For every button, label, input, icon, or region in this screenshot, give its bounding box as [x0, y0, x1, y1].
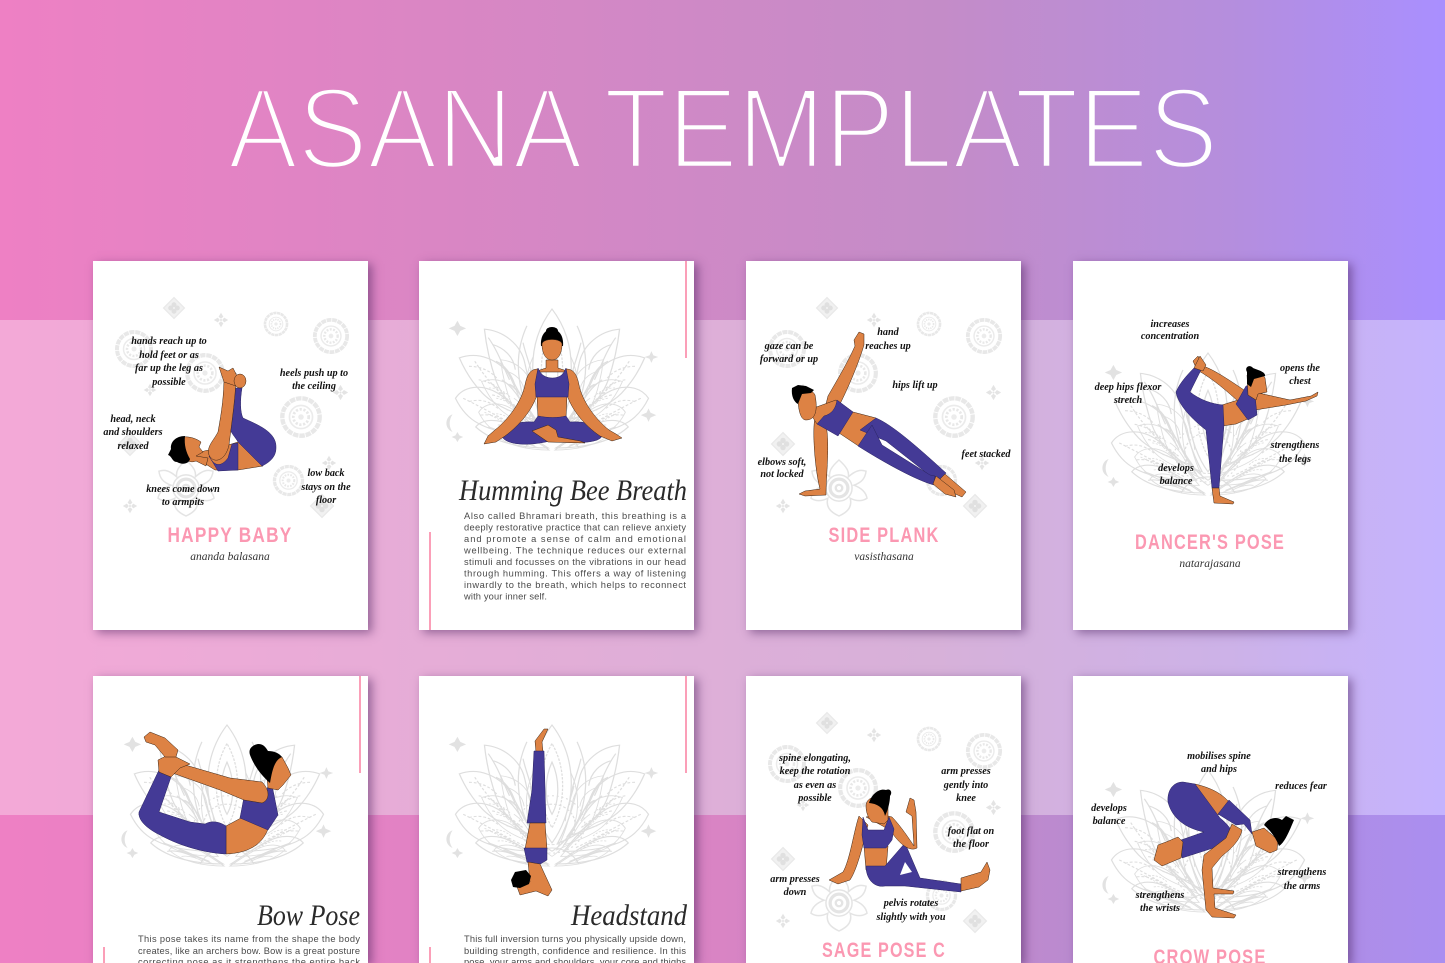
body text: creates, like an archers bow. Bow is a great posture — [138, 946, 360, 956]
annotations: the wrists — [1140, 903, 1180, 914]
annotations: opens the — [1280, 363, 1320, 374]
title: ASANA TEMPLATES — [228, 65, 1218, 193]
mandala lotus — [446, 309, 658, 450]
body text: with your inner self. — [463, 592, 547, 602]
panel: sage pose c — [746, 676, 1021, 963]
annotations — [1091, 751, 1328, 914]
annotations: elbows soft, — [758, 457, 806, 468]
annotations: balance — [1093, 816, 1126, 827]
annotations: hands reach up to — [131, 336, 207, 347]
annotations: gaze can be — [764, 341, 814, 352]
annotations: strengthens — [1270, 440, 1319, 451]
annotations: low back — [307, 468, 345, 479]
annotations: reduces fear — [1275, 781, 1328, 792]
annotations: hips lift up — [892, 380, 938, 391]
annotations: and hips — [1201, 764, 1237, 775]
figure: crow pose — [1154, 782, 1294, 918]
annotations: chest — [1289, 376, 1312, 387]
panel: happy baby — [93, 261, 368, 630]
annotations: keep the rotation — [780, 766, 851, 777]
annotations: gently into — [943, 780, 988, 791]
body text: wellbeing. The technique reduces our external — [463, 546, 686, 556]
panel: side plank — [746, 261, 1021, 630]
body text: through humming. This offers a way of listening — [464, 568, 686, 578]
annotations: heels push up to — [280, 368, 348, 379]
annotations: not locked — [760, 469, 805, 480]
figure: bow pose — [139, 732, 291, 854]
mandala background — [117, 298, 348, 517]
body text: Also called Bhramari breath, this breathing is a — [464, 511, 687, 521]
annotations: the floor — [953, 839, 990, 850]
panel: dancer's pose — [1073, 261, 1348, 630]
sanskrit name: natarajasana — [1179, 558, 1241, 570]
figure: side plank — [792, 332, 966, 497]
annotations — [770, 753, 995, 923]
annotations: increases — [1150, 319, 1190, 330]
body text — [463, 511, 687, 602]
mandala lotus — [121, 725, 333, 866]
annotations: down — [784, 887, 807, 898]
panel: crow pose — [1073, 676, 1348, 963]
sanskrit name: vasisthasana — [854, 551, 914, 563]
annotations: stays on the — [300, 482, 351, 493]
body text: This pose takes its name from the shape the body — [138, 934, 360, 944]
figure: dancer — [1176, 356, 1318, 504]
annotations: knees come down — [146, 484, 220, 495]
annotations: strengthens — [1135, 890, 1184, 901]
body text: and promote a sense of calm and emotional — [464, 534, 686, 544]
mandala background — [770, 298, 1001, 517]
annotations — [758, 327, 1011, 480]
body text — [464, 934, 686, 963]
annotations: slightly with you — [875, 912, 946, 923]
annotations: far up the leg as — [135, 363, 203, 374]
panel: headstand — [419, 676, 694, 963]
accent lines — [103, 676, 361, 963]
panel: humming bee breath — [419, 261, 694, 630]
body text: deeply restorative practice that can relieve anxiety — [464, 522, 686, 532]
accent lines — [429, 261, 687, 630]
annotations: the legs — [1279, 454, 1311, 465]
annotations: knee — [956, 793, 976, 804]
annotations: deep hips flexor — [1095, 382, 1162, 393]
annotations — [1095, 319, 1320, 487]
annotations: mobilises spine — [1187, 751, 1251, 762]
pose title: HAPPY BABY — [168, 524, 292, 547]
annotations: balance — [1160, 476, 1193, 487]
annotations: possible — [151, 377, 186, 388]
annotations: possible — [797, 793, 832, 804]
annotations: the arms — [1284, 881, 1320, 892]
mandala lotus — [1102, 353, 1314, 495]
annotations: head, neck — [110, 414, 157, 425]
figure: happy baby pose — [168, 367, 276, 471]
annotations: arm presses — [941, 766, 991, 777]
annotations: hand — [877, 327, 900, 338]
figure: seated twist — [829, 789, 990, 892]
annotations: foot flat on — [948, 826, 995, 837]
annotations: relaxed — [117, 441, 149, 452]
annotations: floor — [316, 495, 337, 506]
annotations: forward or up — [760, 354, 818, 365]
annotations: develops — [1091, 803, 1127, 814]
body text: building strength, confidence and resilience. In this — [464, 946, 686, 956]
figure: headstand — [511, 729, 552, 896]
annotations: develops — [1158, 463, 1194, 474]
annotations: feet stacked — [962, 449, 1011, 460]
mandala lotus — [1102, 770, 1314, 912]
annotations: concentration — [1141, 331, 1199, 342]
annotations: and shoulders — [103, 427, 163, 438]
pose title: SAGE POSE C — [822, 939, 946, 962]
body text: This full inversion turns you physically upside down, — [464, 934, 686, 944]
annotations: to armpits — [162, 497, 204, 508]
pose title: SIDE PLANK — [828, 524, 940, 547]
annotations: stretch — [1113, 395, 1142, 406]
annotations: reaches up — [865, 341, 911, 352]
panel: bow pose — [93, 676, 368, 963]
mandala lotus — [446, 725, 658, 866]
annotations: pelvis rotates — [883, 898, 938, 909]
pose title: DANCER'S POSE — [1135, 531, 1285, 554]
annotations: the ceiling — [292, 381, 336, 392]
body text: stimuli and focusses on the vibrations in our head — [464, 557, 686, 567]
annotations: as even as — [794, 780, 836, 791]
mandala background — [770, 713, 1001, 932]
figure: seated meditation — [484, 327, 622, 444]
annotations: strengthens — [1277, 867, 1326, 878]
annotations: hold feet or as — [139, 350, 199, 361]
body text: inwardly to the breath, which helps to reconnect — [464, 580, 686, 590]
annotations — [103, 336, 351, 508]
annotations: spine elongating, — [778, 753, 851, 764]
accent lines — [429, 676, 687, 963]
annotations: arm presses — [770, 874, 820, 885]
sanskrit name: ananda balasana — [190, 551, 270, 563]
body text — [138, 934, 360, 963]
